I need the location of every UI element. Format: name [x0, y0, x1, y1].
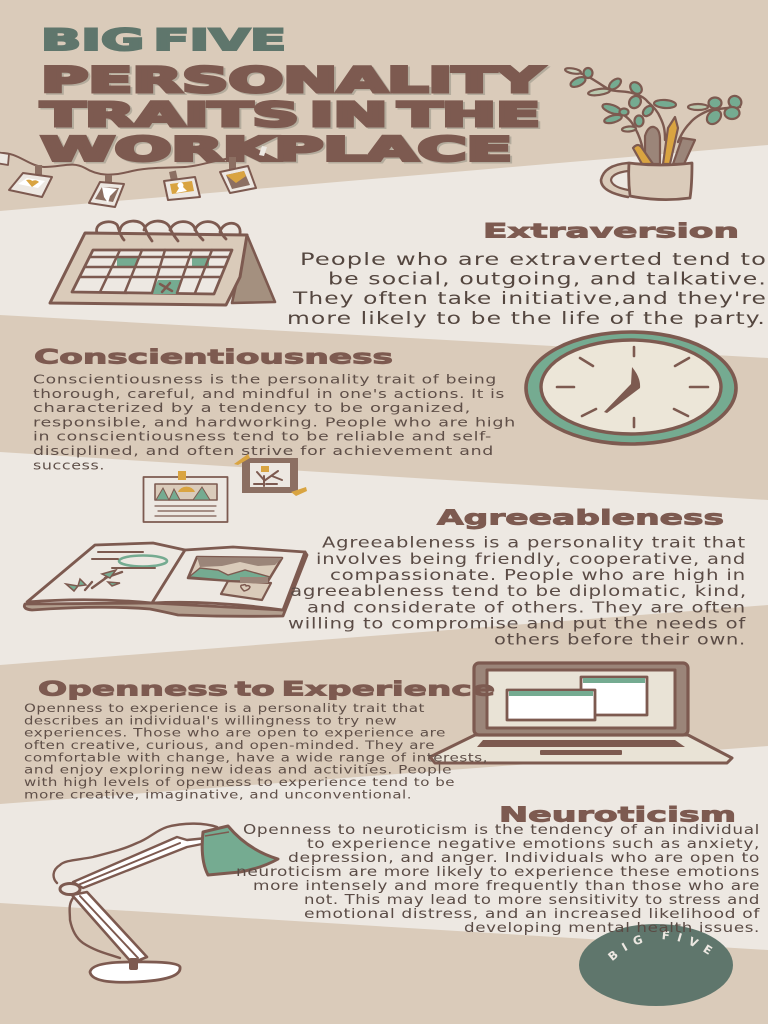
- text: extraversion body: more likely to be the life of the party.: [287, 309, 766, 329]
- text: neuroticism body: more intensely and more frequently than those who are: [253, 879, 760, 894]
- title: personality traits in the workplace: PERSONALITY: [43, 62, 546, 102]
- icon: framed flower picture: [234, 454, 307, 496]
- title: personality traits in the workplace: [41, 61, 546, 170]
- icon: desk lamp: [54, 824, 278, 982]
- text: agreeableness body: compassionate. People who are high in: [330, 566, 746, 584]
- icon: wall clock: [526, 332, 736, 444]
- icon: pinned landscape photo: [144, 471, 228, 522]
- text: openness body: comfortable with change, have a wide range of interests,: [24, 750, 488, 764]
- text: neuroticism body: to experience negative emotions such as anxiety,: [307, 837, 760, 852]
- text: openness body: describes an individual's willingness to try new: [24, 713, 397, 727]
- title: personality traits in the workplace: PERSONALITY: [41, 61, 544, 101]
- text: conscientiousness body: thorough, careful, and mindful in one's actions. It is: [33, 386, 505, 401]
- icon: open book: [24, 543, 307, 616]
- text: agreeableness body: involves being friendly, cooperative, and: [316, 550, 746, 568]
- heading: neuroticism: Neuroticism: [499, 802, 736, 826]
- text: neuroticism body: emotional distress, and an increased likelihood of: [304, 907, 760, 922]
- text: openness body: more creative, imaginative, and unconventional.: [24, 787, 412, 801]
- text: openness body: Openness to experience is a personality trait that: [24, 701, 425, 715]
- text: conscientiousness body: Conscientiousness is the personality trait of being: [33, 372, 497, 386]
- section: openness to experience: [24, 678, 495, 801]
- heading: agreeableness: Agreeableness: [437, 506, 724, 530]
- text: conscientiousness body: in conscientiousness tend to be reliable and self-: [33, 429, 492, 444]
- text: conscientiousness body: [33, 372, 516, 472]
- text: extraversion body: be social, outgoing, and talkative.: [328, 270, 767, 290]
- text: agreeableness body: Agreeableness is a personality trait that: [322, 533, 746, 551]
- text: neuroticism body: depression, and anger. Individuals who are open to: [288, 851, 760, 866]
- section: agreeableness: [288, 506, 747, 648]
- text: agreeableness body: others before their own.: [494, 630, 746, 648]
- title: personality traits in the workplace: TRAITS IN THE: [41, 95, 540, 134]
- text: conscientiousness body: disciplined, and often strive for achievement and: [33, 443, 494, 458]
- section: conscientiousness: [33, 346, 516, 472]
- title: big five: BIG FIVE: [41, 23, 286, 57]
- text: agreeableness body: willing to compromise and put the needs of: [288, 614, 746, 632]
- badge: big five: [579, 924, 733, 1006]
- text: openness body: with high levels of openness to experience tend to be: [24, 775, 455, 789]
- text: conscientiousness body: success.: [33, 457, 105, 472]
- text: conscientiousness body: responsible, and hardworking. People who are high: [33, 414, 516, 429]
- icon: mug with pens and plant: [565, 67, 744, 200]
- text: openness body: [24, 701, 488, 801]
- text: openness body: often creative, curious, and open-minded. They are: [24, 738, 435, 752]
- icon: calendar: [50, 221, 275, 305]
- text: conscientiousness body: characterized by a tendency to be organized,: [33, 400, 471, 415]
- title: personality traits in the workplace: TRAITS IN THE: [43, 96, 542, 136]
- section: neuroticism: [236, 802, 760, 936]
- text: agreeableness body: and considerate of others. They are often: [307, 598, 746, 616]
- text: extraversion body: [287, 250, 767, 329]
- heading: openness to experience: Openness to Experience: [38, 678, 495, 700]
- text: neuroticism body: developing mental health issues.: [464, 921, 760, 936]
- text: openness body: experiences. Those who are open to experience are: [24, 726, 446, 740]
- text: openness body: and enjoy exploring new ideas and activities. People: [24, 763, 452, 777]
- text: neuroticism body: [236, 823, 760, 936]
- badge: big five: BIG FIVE: [608, 930, 712, 961]
- text: neuroticism body: Openness to neuroticism is the tendency of an individual: [243, 823, 760, 838]
- text: extraversion body: People who are extraverted tend to: [300, 250, 767, 270]
- heading: extraversion: Extraversion: [483, 220, 739, 242]
- title: personality traits in the workplace: WORKPLACE: [43, 131, 514, 170]
- text: extraversion body: They often take initiative,and they're: [292, 289, 767, 309]
- title: personality traits in the workplace: WORKPLACE: [41, 130, 512, 168]
- icon: photo garland: [0, 146, 267, 207]
- text: neuroticism body: neuroticism are more likely to experience these emotions: [236, 865, 760, 880]
- text: agreeableness body: [288, 533, 747, 648]
- section: extraversion: [287, 220, 767, 329]
- icon: laptop: [430, 663, 732, 763]
- text: neuroticism body: not. This may lead to more sensitivity to stress and: [304, 893, 760, 908]
- text: agreeableness body: agreeableness tend to be diplomatic, kind,: [290, 582, 747, 600]
- heading: conscientiousness: Conscientiousness: [34, 346, 393, 368]
